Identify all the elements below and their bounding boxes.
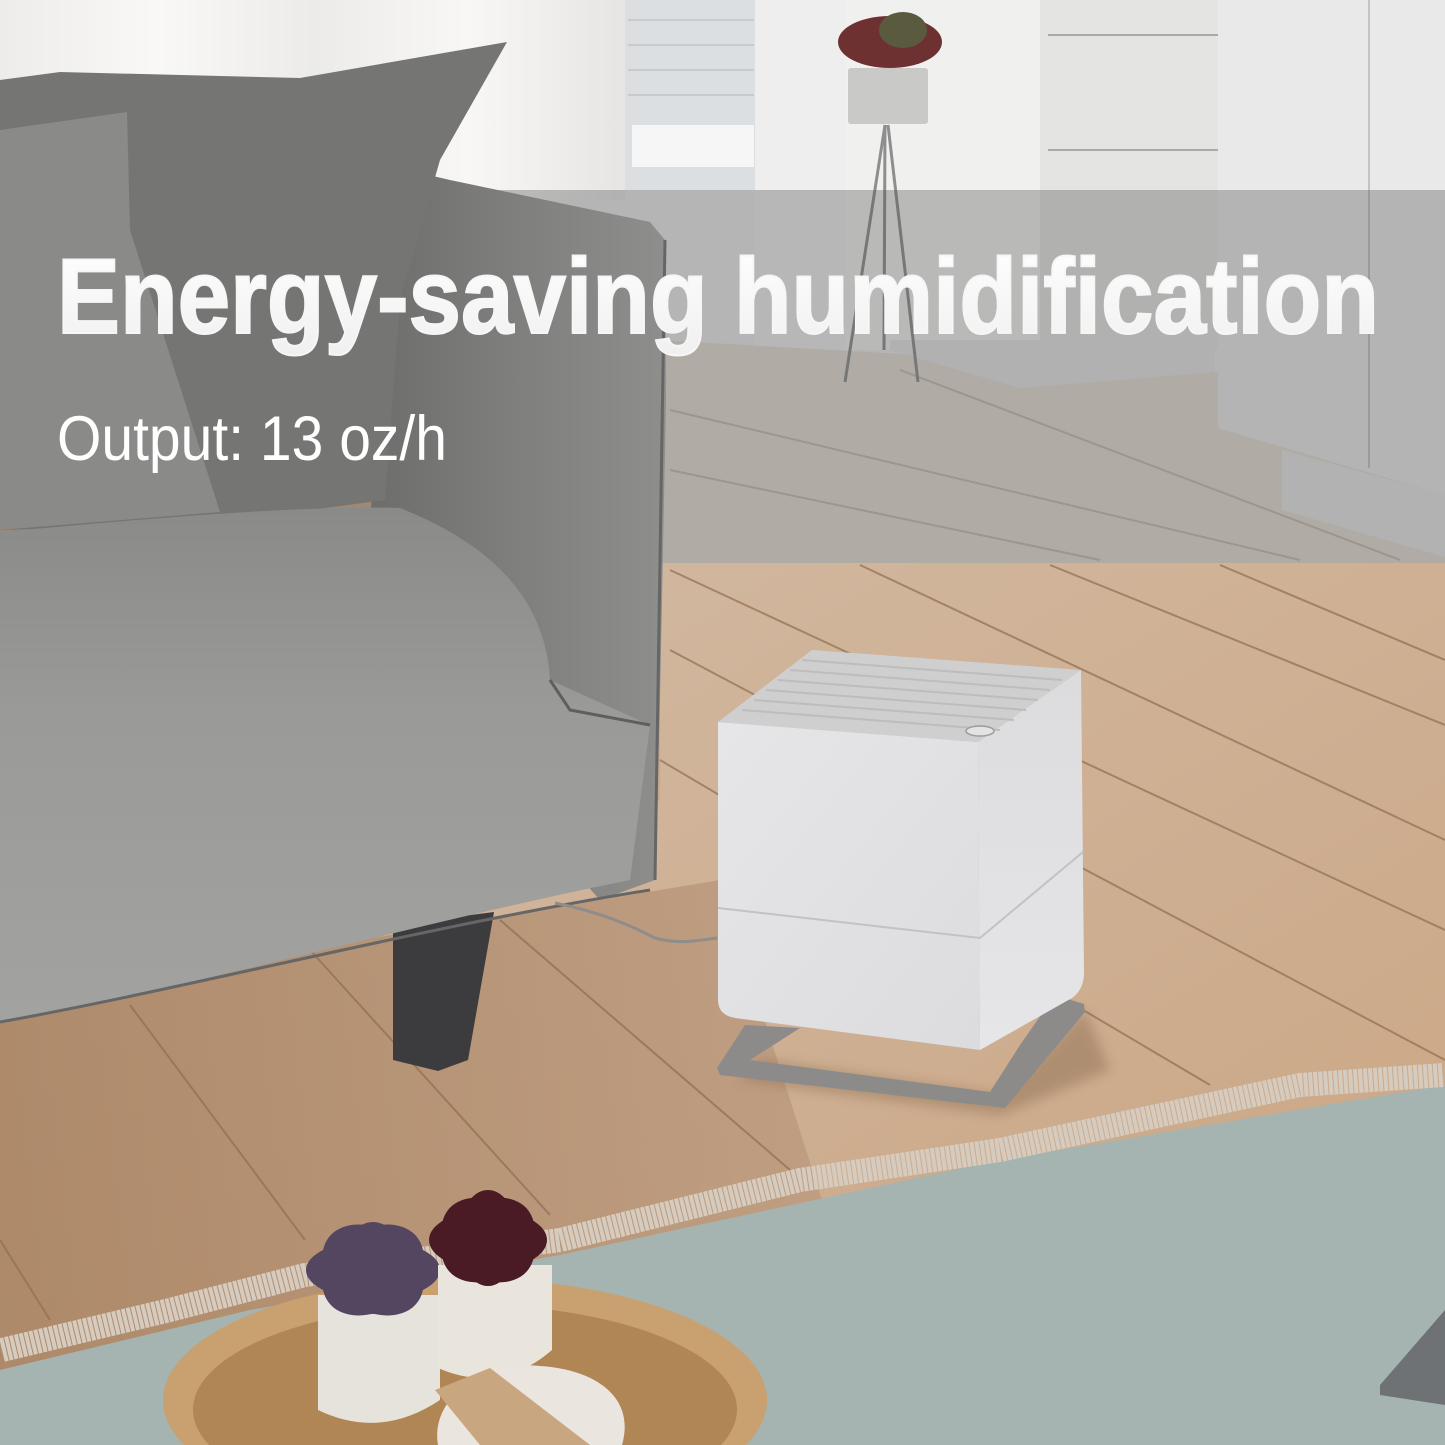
button — [966, 726, 994, 736]
metal stand — [717, 995, 1085, 1108]
basket with succulents — [163, 1180, 767, 1445]
rug — [0, 1075, 1445, 1445]
body side — [978, 670, 1084, 1050]
right pot — [438, 1265, 552, 1378]
seam — [718, 852, 1083, 938]
right cabinet — [1218, 0, 1445, 557]
plant on stand — [838, 12, 942, 382]
floor shadow — [740, 1010, 1110, 1115]
back cushion — [0, 42, 507, 530]
small bowl with crackers — [437, 1365, 625, 1445]
body front — [718, 722, 980, 1050]
sofa — [0, 42, 666, 1071]
cabinet plinth — [890, 340, 1215, 388]
subtitle: Output: 13 oz/h — [57, 404, 447, 474]
top vents — [718, 650, 1081, 742]
sofa seat and front — [0, 508, 650, 1022]
grey translucent band — [0, 190, 1445, 563]
humidifier — [717, 650, 1110, 1115]
power cord — [555, 903, 717, 942]
room background — [0, 0, 1445, 400]
right succulent — [425, 1180, 551, 1300]
floor — [0, 340, 1445, 1445]
left succulent — [305, 1206, 441, 1334]
cushion corner — [1380, 1310, 1445, 1405]
sofa leg — [393, 912, 494, 1071]
basket inner — [193, 1305, 737, 1445]
front cushion — [0, 112, 220, 530]
sofa arm — [370, 173, 666, 900]
basket rim — [163, 1278, 767, 1445]
left pot — [318, 1295, 440, 1423]
